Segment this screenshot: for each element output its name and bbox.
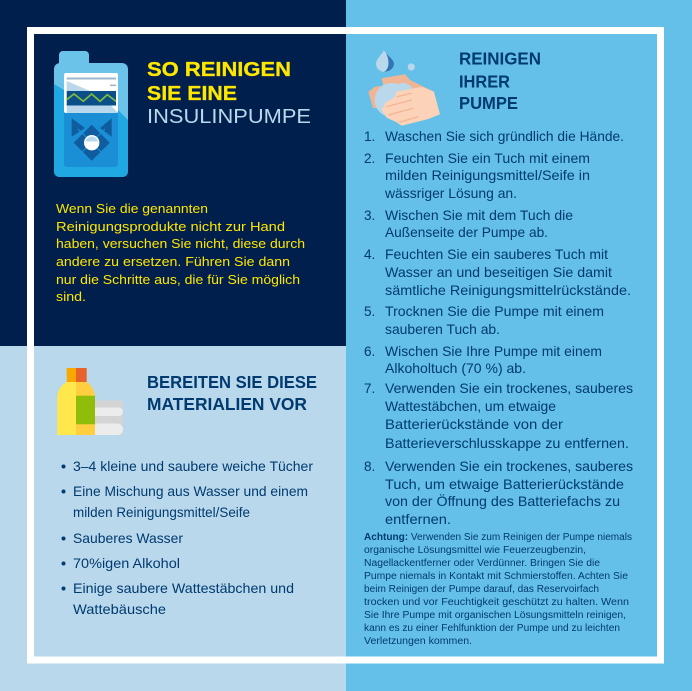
text block: yellow note: Reinigungsprodukte nicht zur Hand (56, 219, 285, 234)
list: materials: 70%igen Alkohol (73, 556, 180, 571)
title: SO REINIGEN (147, 59, 291, 81)
numbered list: cleaning steps: Außenseite der Pumpe ab. (385, 225, 548, 240)
numbered list: cleaning steps: 2. (364, 151, 375, 166)
heading: cleaning (459, 48, 541, 113)
text block: warning: Sie Ihre Pumpe mit organischen Lösungsmitteln reinigen, (364, 610, 626, 621)
numbered list: cleaning steps: Verwenden Sie ein trockenes, sauberes (385, 459, 633, 474)
numbered list: cleaning steps: 1. (364, 129, 375, 144)
text block: warning: kann es zu einer Fehlfunktion der Pumpe und zu leichten (364, 623, 620, 634)
numbered list: cleaning steps: Wasser an und beseitigen Sie damit (385, 265, 612, 280)
text block: yellow note: nur die Schritte aus, die für Sie möglich (56, 272, 300, 287)
numbered list: cleaning steps: Wischen Sie mit dem Tuch die (385, 208, 573, 223)
numbered list: cleaning steps: von der Öffnung des Batteriefachs zu (385, 494, 620, 509)
panel: navy top left (0, 0, 346, 346)
list: materials: milden Reinigungsmittel/Seife (73, 505, 250, 520)
text block: yellow note: sind. (56, 289, 86, 304)
numbered list: cleaning steps: Wischen Sie Ihre Pumpe mit einem (385, 344, 602, 359)
list: materials: Eine Mischung aus Wasser und einem (73, 484, 308, 499)
text block: warning: Verletzungen kommen. (364, 636, 472, 647)
numbered list: cleaning steps: 6. (364, 344, 375, 359)
numbered list: cleaning steps: 4. (364, 247, 375, 262)
panel: light blue bottom left (0, 346, 346, 691)
numbered list: cleaning steps: Verwenden Sie ein trockenes, sauberes (385, 381, 633, 396)
numbered list: cleaning steps: milden Reinigungsmittel/Seife in (385, 168, 590, 183)
title: SIE EINE (147, 83, 237, 105)
text block: warning: beim Reinigen der Pumpe darauf, das Reservoirfach (364, 584, 599, 595)
text block: yellow note (56, 201, 305, 304)
text block: warning: Achtung: Verwenden Sie zum Reinigen der Pumpe niemals (364, 532, 632, 543)
list: materials: Wattebäusche (73, 602, 166, 617)
heading: materials (147, 372, 317, 414)
numbered list: cleaning steps: Feuchten Sie ein Tuch mit einem (385, 151, 590, 166)
title: INSULINPUMPE (147, 106, 311, 128)
icon: insulin pump (54, 51, 128, 177)
heading: cleaning: IHRER (459, 72, 510, 92)
heading: cleaning: REINIGEN (459, 48, 541, 68)
numbered list: cleaning steps: sämtliche Reinigungsmittelrückstände. (385, 283, 631, 298)
text block: warning (364, 532, 632, 647)
numbered list: cleaning steps: 7. (364, 381, 375, 396)
numbered list: cleaning steps: Tuch, um etwaige Batterierückstände (385, 477, 624, 492)
numbered list: cleaning steps (364, 129, 633, 527)
text block: yellow note: Wenn Sie die genannten (56, 201, 208, 216)
numbered list: cleaning steps: entfernen. (385, 512, 451, 527)
numbered list: cleaning steps: Batterieverschlusskappe zu entfernen. (385, 436, 629, 451)
numbered list: cleaning steps: wässriger Lösung an. (384, 186, 517, 201)
list: materials (62, 459, 313, 617)
text block: yellow note: andere zu ersetzen. Führen Sie dann (56, 254, 290, 269)
numbered list: cleaning steps: sauberen Tuch ab. (385, 322, 500, 337)
numbered list: cleaning steps: 5. (364, 304, 375, 319)
numbered list: cleaning steps: 3. (364, 208, 375, 223)
panel: sky blue right (346, 0, 692, 691)
text block: warning: Nagellackentferner oder Verdünner. Bringen Sie die (364, 558, 600, 569)
numbered list: cleaning steps: Batterierückstände von der (385, 417, 564, 432)
text block: yellow note: haben, versuchen Sie nicht, diese durch (56, 236, 305, 251)
title (147, 59, 311, 128)
numbered list: cleaning steps: Trocknen Sie die Pumpe mit einem (385, 304, 604, 319)
heading: cleaning: PUMPE (459, 93, 518, 113)
numbered list: cleaning steps: Feuchten Sie ein sauberes Tuch mit (385, 247, 608, 262)
numbered list: cleaning steps: Waschen Sie sich gründlich die Hände. (385, 129, 624, 144)
list: materials: Sauberes Wasser (73, 531, 183, 546)
icon: washing hands (368, 50, 440, 126)
list: materials: 3–4 kleine und saubere weiche Tücher (73, 459, 313, 474)
text block: warning: trocken und vor Feuchtigkeit geschützt zu halten. Wenn (364, 597, 629, 608)
numbered list: cleaning steps: Wattestäbchen, um etwaige (385, 399, 556, 414)
heading: materials: MATERIALIEN VOR (147, 394, 307, 414)
numbered list: cleaning steps: Alkoholtuch (70 %) ab. (385, 361, 526, 376)
text block: warning: organische Lösungsmittel wie Feuerzeugbenzin, (364, 545, 586, 556)
list: materials: Einige saubere Wattestäbchen und (73, 581, 294, 596)
text block: warning: Pumpe niemals in Kontakt mit Schmierstoffen. Achten Sie (364, 571, 628, 582)
heading: materials: BEREITEN SIE DIESE (147, 372, 317, 392)
icon: bottle and towels (57, 368, 123, 435)
numbered list: cleaning steps: 8. (364, 459, 375, 474)
